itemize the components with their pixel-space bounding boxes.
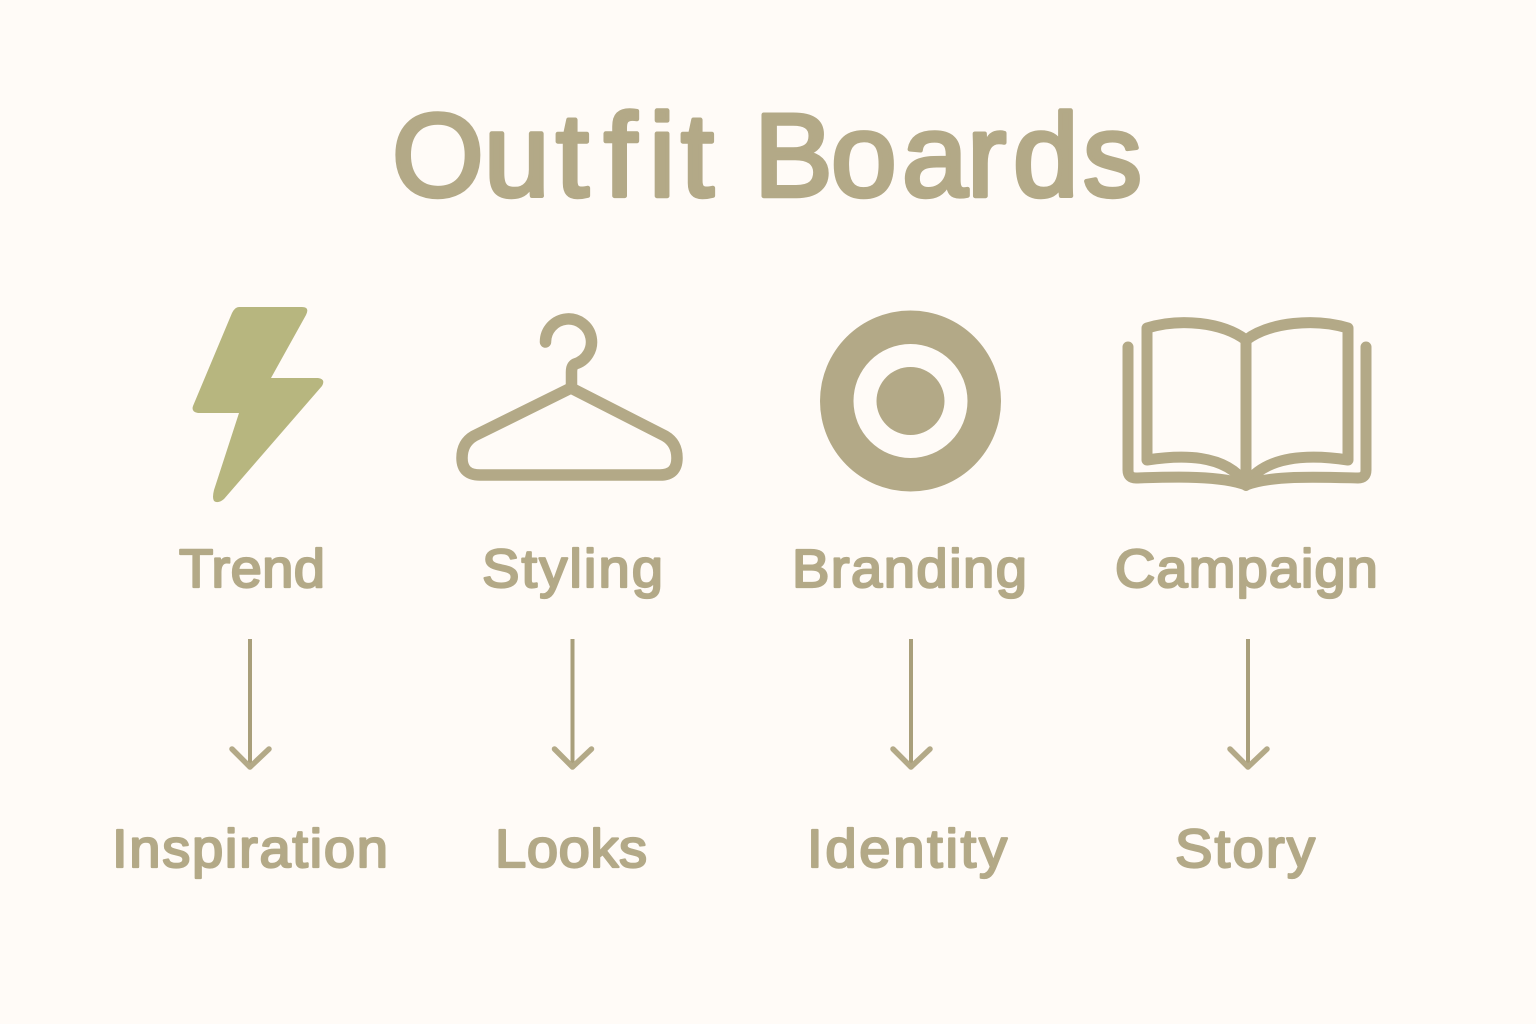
icon: lightning bolt	[193, 307, 323, 502]
label: Styling: Styling	[482, 538, 663, 599]
icon: clothes hanger	[462, 319, 677, 475]
arrow: Branding to Identity	[893, 639, 930, 767]
icon: open book	[1128, 323, 1366, 491]
label: Inspiration: Inspiration	[112, 818, 388, 879]
label: Identity: Identity	[807, 818, 1007, 879]
arrow: Trend to Inspiration	[232, 639, 269, 767]
arrow: Styling to Looks	[554, 639, 592, 767]
title: OutfitBoards	[392, 90, 1142, 222]
label: Story: Story	[1175, 818, 1315, 879]
label: Trend: Trend	[179, 538, 325, 599]
label: Branding: Branding	[792, 538, 1027, 599]
label: Looks: Looks	[495, 818, 647, 879]
label: Campaign: Campaign	[1115, 538, 1378, 599]
arrow: Campaign to Story	[1230, 639, 1267, 767]
icon: target	[820, 310, 1001, 492]
